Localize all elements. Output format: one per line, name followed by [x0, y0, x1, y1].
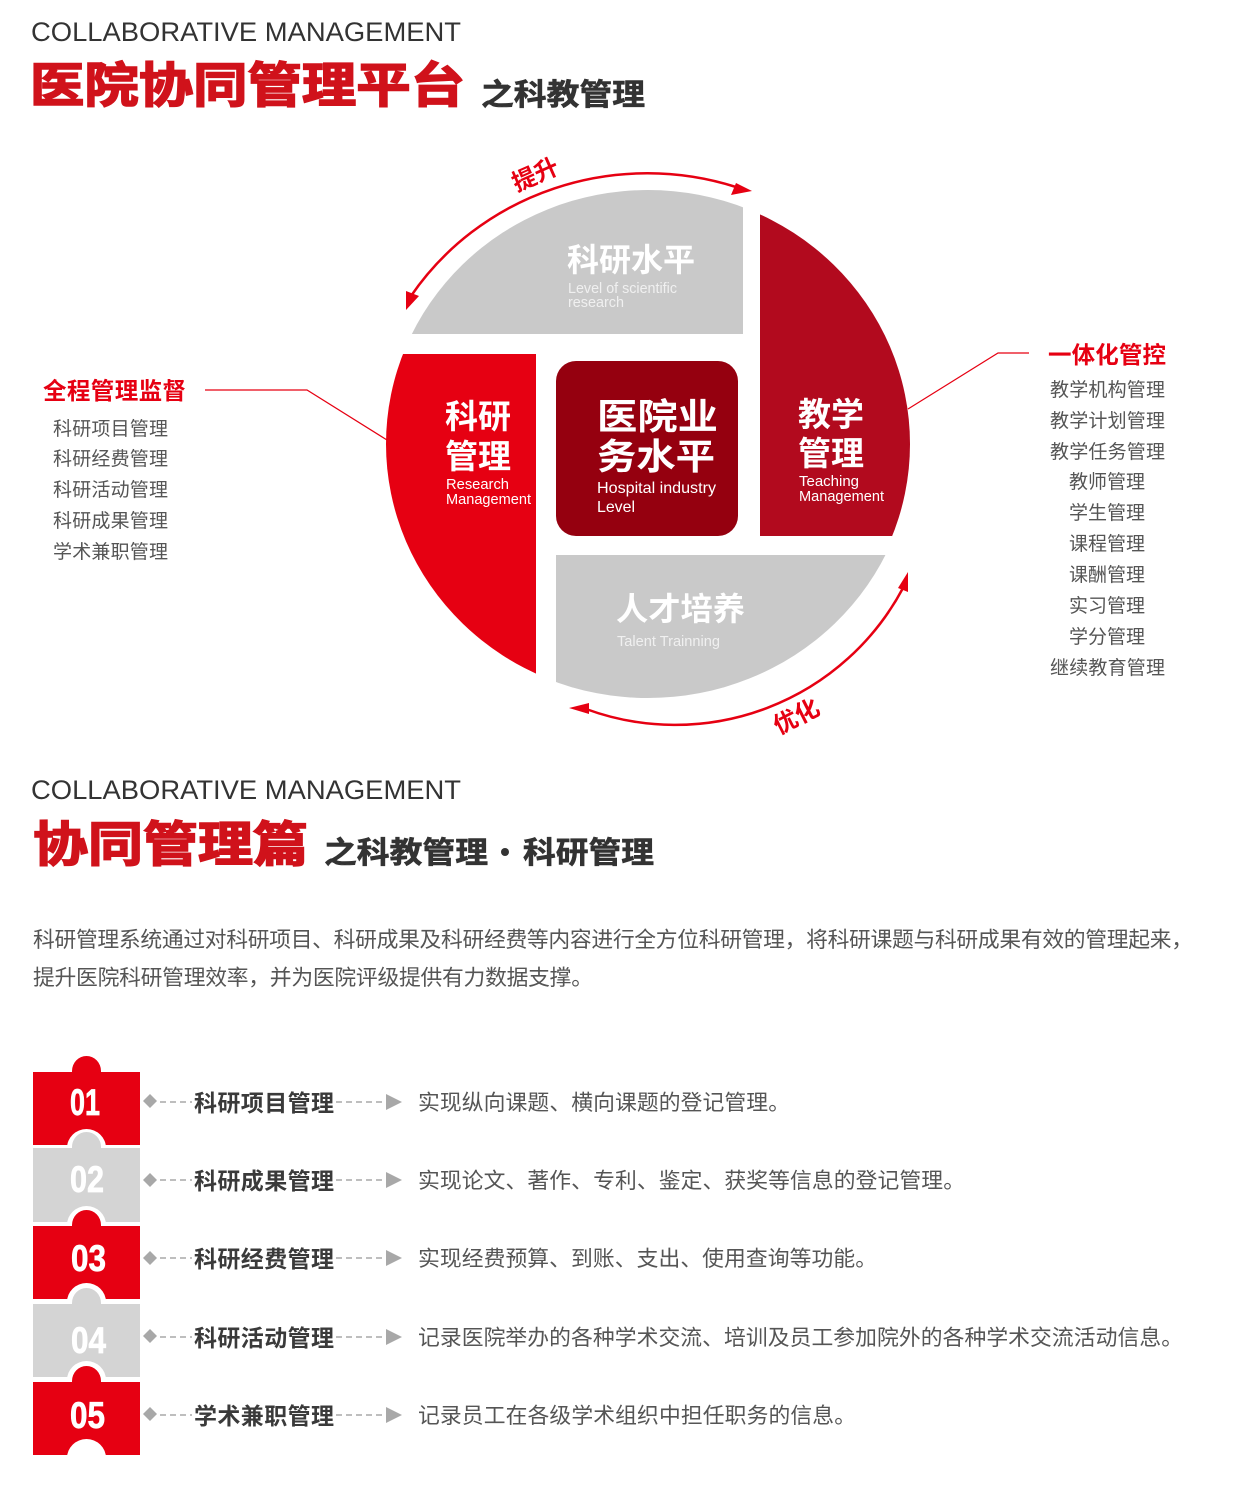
puzzle stack	[33, 1056, 140, 1458]
right list items: 课程管理	[1069, 533, 1145, 555]
row 05	[143, 1403, 856, 1429]
segment: research level: 科研水平	[567, 242, 695, 278]
segment: talent training: 人才培养	[616, 591, 745, 627]
center tile: hospital level: Hospital industry	[597, 480, 716, 497]
right list items: 教师管理	[1069, 471, 1145, 493]
segment: research management: 管理	[445, 438, 511, 475]
puzzle piece 04: 04	[71, 1320, 106, 1361]
label: upgrade: 提升	[508, 153, 563, 197]
subtitle: 之科教管理	[481, 79, 645, 112]
row 01	[143, 1090, 790, 1116]
row 05: 记录员工在各级学术组织中担任职务的信息。	[418, 1403, 856, 1428]
row 01: 实现纵向课题、横向课题的登记管理。	[418, 1090, 790, 1115]
leader line left	[205, 390, 387, 440]
row 05: 学术兼职管理	[194, 1403, 334, 1429]
heading: research section	[31, 775, 654, 872]
intro paragraph	[33, 927, 1193, 990]
center tile: hospital level	[556, 361, 738, 536]
right list items: 课酬管理	[1069, 564, 1145, 586]
right list items: 教学计划管理	[1050, 410, 1165, 432]
puzzle piece 02	[33, 1132, 140, 1225]
callout: right list	[908, 342, 1166, 679]
subtitle end: 科研管理	[523, 837, 654, 870]
leader line right	[908, 353, 1029, 409]
left list items: 科研活动管理	[53, 479, 168, 501]
segment: research management	[380, 354, 536, 684]
english kicker: COLLABORATIVE MANAGEMENT	[31, 17, 461, 47]
left list heading: 全程管理监督	[43, 378, 186, 404]
puzzle piece 03	[33, 1210, 140, 1302]
center tile: hospital level: 务水平	[597, 436, 715, 477]
puzzle piece 05: 05	[70, 1395, 105, 1436]
row 03: 实现经费预算、到账、支出、使用查询等功能。	[418, 1246, 877, 1271]
left list items: 科研经费管理	[53, 448, 168, 470]
circular diagram	[380, 153, 920, 740]
center tile: hospital level: Level	[597, 499, 635, 516]
segment: teaching management	[760, 214, 910, 536]
row 02	[143, 1168, 965, 1194]
left list items	[53, 418, 168, 563]
right list items: 继续教育管理	[1050, 657, 1165, 679]
arrow: bottom arc	[569, 572, 908, 725]
english kicker: COLLABORATIVE MANAGEMENT	[31, 775, 461, 805]
left list items: 科研项目管理	[53, 418, 168, 440]
puzzle piece 01	[33, 1056, 140, 1148]
row 03: 科研经费管理	[194, 1246, 334, 1272]
right list items: 实习管理	[1069, 595, 1145, 617]
subtitle dot	[501, 848, 509, 856]
segment: research level: Level of scientific	[568, 281, 677, 297]
segment: research management: Management	[446, 492, 531, 508]
intro paragraph: 科研管理系统通过对科研项目、科研成果及科研经费等内容进行全方位科研管理，将科研课题与科研成果有效的管理起来，	[33, 927, 1193, 952]
intro paragraph: 提升医院科研管理效率，并为医院评级提供有力数据支撑。	[33, 965, 593, 990]
label: optimize: 优化	[769, 694, 824, 740]
segment: research level: research	[568, 295, 624, 311]
puzzle piece 01: 01	[70, 1082, 100, 1123]
puzzle piece 04	[33, 1288, 140, 1380]
puzzle piece 03: 03	[71, 1238, 106, 1279]
segment: research management: Research	[446, 477, 509, 493]
row 02: 科研成果管理	[194, 1168, 334, 1194]
right list items: 教学机构管理	[1050, 379, 1165, 401]
right list items: 教学任务管理	[1050, 441, 1165, 463]
puzzle piece 02: 02	[70, 1159, 104, 1200]
red title: 医院协同管理平台	[30, 60, 465, 113]
segment: research management: 科研	[445, 398, 511, 435]
heading: platform section	[30, 17, 645, 113]
row 01: 科研项目管理	[194, 1090, 334, 1116]
segment: research level	[412, 190, 743, 334]
right list items	[1050, 379, 1165, 679]
segment: teaching management: Management	[799, 489, 884, 505]
right list heading: 一体化管控	[1048, 342, 1166, 368]
center tile: hospital level: 医院业	[597, 396, 718, 437]
puzzle piece 05	[33, 1366, 140, 1458]
segment: talent training	[556, 555, 886, 698]
arrow: top arc	[406, 173, 752, 310]
segment: teaching management: Teaching	[799, 474, 859, 490]
subtitle: 之科教管理	[324, 837, 488, 870]
segment: talent training: Talent Trainning	[617, 634, 720, 650]
left list items: 学术兼职管理	[53, 541, 168, 563]
right list items: 学分管理	[1069, 626, 1145, 648]
segment: teaching management: 管理	[798, 435, 864, 472]
right list items: 学生管理	[1069, 502, 1145, 524]
row 04: 科研活动管理	[194, 1325, 334, 1351]
segment: teaching management: 教学	[798, 396, 864, 433]
red title: 协同管理篇	[33, 819, 308, 872]
row 03	[143, 1246, 877, 1272]
row 02: 实现论文、著作、专利、鉴定、获奖等信息的登记管理。	[418, 1168, 965, 1193]
callout: left list	[43, 378, 387, 563]
left list items: 科研成果管理	[53, 510, 168, 532]
row 04: 记录医院举办的各种学术交流、培训及员工参加院外的各种学术交流活动信息。	[418, 1325, 1183, 1350]
